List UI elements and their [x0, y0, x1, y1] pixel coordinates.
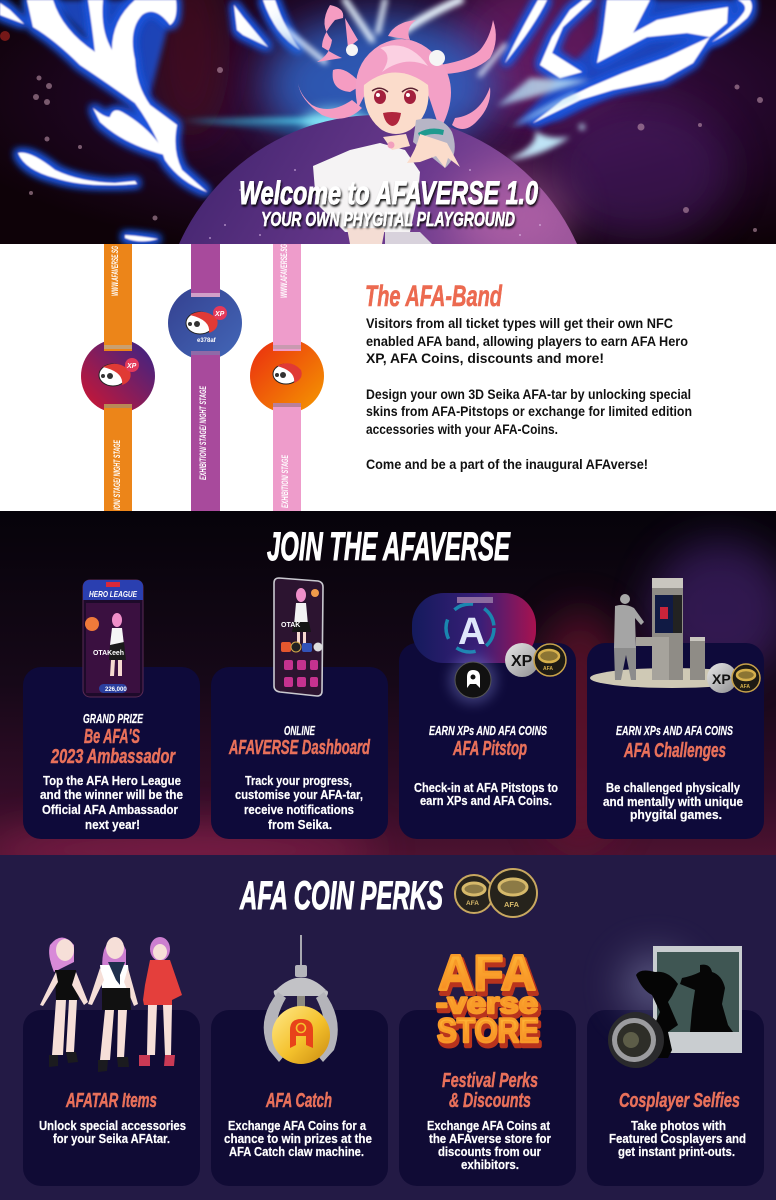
blue wash behind wisps: [50, 0, 755, 125]
card: AFA Challenges: phygital games.: [630, 807, 722, 822]
mascot: [273, 363, 302, 384]
card: Cosplayer Selfies: Take photos with: [631, 1118, 726, 1133]
hero subtitle: YOUR OWN PHYGITAL PLAYGROUND: [261, 209, 515, 231]
logo: AFA-verse store: -verse: [436, 987, 538, 1020]
heading: The AFA-Band: The AFA-Band: [365, 280, 502, 313]
sleeve: [413, 118, 455, 168]
card: Grand Prize: 2023 Ambassador: [50, 746, 176, 768]
card: Festival Perks: & Discounts: [449, 1090, 531, 1112]
icon: AFA coin: AFA: [740, 684, 750, 690]
card: Cosplayer Selfies: get instant print-outs.: [618, 1144, 735, 1159]
panel: hero banner: [0, 0, 776, 244]
card: AFA Pitstop: AFA Pitstop: [452, 738, 527, 760]
planet: [179, 115, 589, 244]
white outfit: [313, 143, 420, 232]
text block: band description: enabled AFA band, allowing players to earn AFA Hero: [366, 333, 688, 349]
icon: AFA coin pair: AFA: [466, 900, 479, 907]
wristband: pink: EXHIBITION/ STAGE: [280, 454, 290, 508]
face: [364, 72, 429, 134]
card: Festival Perks: Exchange AFA Coins at: [427, 1118, 551, 1133]
card: AFA Pitstop: earn XPs and AFA Coins.: [420, 793, 552, 808]
heading: AFA Coin Perks: AFA COIN PERKS: [239, 874, 443, 918]
hand: [407, 134, 460, 168]
card: Grand Prize: [23, 580, 200, 839]
icon: AFA coin: [732, 664, 760, 692]
logo: AFA-verse store: [436, 945, 541, 1054]
artwork: pale cyan wisps: [497, 78, 590, 160]
card: Festival Perks: [399, 945, 576, 1186]
wristband: orange: [81, 244, 155, 511]
illustration: challenge kiosk: [590, 578, 710, 688]
card: AFAVERSE Dashboard: ONLINE: [284, 723, 315, 738]
card: AFA Challenges: AFA Challenges: [623, 740, 726, 762]
card: Grand Prize: Be AFA'S: [84, 726, 140, 748]
card: Grand Prize: and the winner will be the: [40, 787, 183, 802]
card: Cosplayer Selfies: [587, 946, 764, 1186]
card: Festival Perks: discounts from our: [438, 1144, 541, 1159]
avatar: black dress: [40, 938, 88, 1067]
card: AFA Pitstop: [399, 593, 576, 839]
hair strands: [298, 5, 496, 129]
wristband: orange: WWW.AFAVERSE.SG: [110, 246, 120, 296]
avatar: red hoodie: [139, 937, 182, 1066]
card: AFAVERSE Dashboard: from Seika.: [268, 817, 332, 832]
avatar: sailor shirt: [88, 937, 138, 1072]
wristband: orange: XP: [126, 363, 137, 370]
icon: pitstop screen: [412, 593, 536, 663]
phone: Hero League: 226,000: [105, 687, 127, 693]
text block: band description: [366, 315, 692, 472]
artwork: glowing wisps: [0, 0, 752, 241]
heading: Join the AFAverse: JOIN THE AFAVERSE: [267, 525, 511, 569]
hero title: Welcome to AFAVERSE 1.0: [239, 175, 538, 211]
card: AFAVERSE Dashboard: AFAVERSE Dashboard: [228, 737, 371, 759]
card: AFA Catch: [211, 935, 388, 1186]
card: Grand Prize: next year!: [85, 817, 140, 832]
illustration: claw with coin: [264, 935, 338, 1064]
card: Festival Perks: Festival Perks: [442, 1070, 538, 1092]
artwork: streaks behind character: [265, 0, 505, 155]
logo: AFA-verse store: AFA: [438, 945, 536, 1001]
character: Seika: [298, 5, 496, 244]
mascot: [99, 364, 131, 386]
card: Festival Perks: the AFAverse store for: [429, 1131, 551, 1146]
phone: Hero League: HERO LEAGUE: [89, 589, 137, 599]
card: AFATAR Items: [23, 937, 200, 1186]
text block: band description: Visitors from all ticket types will get their own NFC: [366, 315, 673, 331]
card: Grand Prize: Official AFA Ambassador: [42, 802, 178, 817]
lens flare: [186, 100, 370, 135]
text block: band description: Design your own 3D Seika AFA-tar by unlocking special: [366, 386, 691, 402]
icon: AFA coin: [534, 644, 566, 676]
phone: dashboard: [274, 578, 323, 696]
icon: AFA coin pair: AFA: [504, 900, 520, 909]
wristband: pink: WWW.AFAVERSE.SG: [279, 244, 289, 298]
card: AFA Catch: chance to win prizes at the: [224, 1131, 372, 1146]
card: Festival Perks: exhibitors.: [461, 1157, 519, 1172]
card: AFA Challenges: Be challenged physically: [606, 780, 741, 795]
card: AFA Catch: Exchange AFA Coins for a: [228, 1118, 367, 1133]
card: AFA Pitstop: Check-in at AFA Pitstops to: [414, 780, 558, 795]
card: AFA Pitstop: EARN XPs AND AFA COINS: [429, 723, 547, 738]
logo: AFA-verse store: STORE: [439, 1016, 541, 1054]
card: Cosplayer Selfies: Featured Cosplayers and: [609, 1131, 746, 1146]
illustration: print-out and camera lens: [608, 946, 742, 1068]
icon: pitstop screen: A: [458, 611, 485, 653]
phone: Hero League: [83, 580, 143, 697]
card: Grand Prize: GRAND PRIZE: [83, 711, 143, 726]
card: AFATAR Items: AFATAR Items: [65, 1090, 157, 1112]
card: AFA Catch: AFA Catch claw machine.: [229, 1144, 364, 1159]
card: AFA Catch: AFA Catch: [265, 1090, 332, 1112]
wristband: purple: e378af: [197, 338, 217, 344]
card: AFATAR Items: for your Seika AFAtar.: [53, 1131, 170, 1146]
icon: XP coin: [707, 663, 737, 693]
wristband: purple: EXHIBITION/ STAGE/ NIGHT STAGE: [198, 385, 208, 480]
silhouette: armored cosplayer: [680, 965, 733, 1032]
panel: AFA-Band: [0, 244, 776, 511]
mascot: [186, 312, 218, 334]
wristband: purple: XP: [214, 311, 225, 318]
panel: AFA Coin Perks: [0, 855, 776, 1200]
text block: band description: XP, AFA Coins, discounts and more!: [366, 350, 604, 366]
logo: AFA-verse store: STORE: [437, 1012, 539, 1050]
card: AFAVERSE Dashboard: [211, 578, 388, 839]
card: AFAVERSE Dashboard: receive notifications: [244, 802, 354, 817]
card: AFA Challenges: and mentally with unique: [603, 794, 743, 809]
card: AFAVERSE Dashboard: Track your progress,: [245, 773, 352, 788]
wristband: pink: [250, 244, 324, 511]
card: AFA Challenges: [587, 578, 764, 839]
text block: band description: accessories with your AFA-Coins.: [366, 421, 558, 437]
card: Grand Prize: Top the AFA Hero League: [43, 773, 181, 788]
icon: AFA coin: AFA: [543, 666, 553, 672]
phone: dashboard: OTAK: [281, 622, 300, 629]
silhouette: female cosplayer: [636, 971, 678, 1058]
icon: AFA coin pair: [455, 869, 537, 917]
text block: band description: Come and be a part of the inaugural AFAverse!: [366, 456, 648, 472]
card: AFATAR Items: Unlock special accessories: [39, 1118, 186, 1133]
icon: XP coin: XP: [712, 671, 731, 687]
icon: XP coin: [505, 643, 539, 677]
logo: AFA-verse store: AFA: [440, 949, 538, 1005]
illustration: three avatars: [40, 937, 182, 1072]
camera lens: [608, 1012, 664, 1068]
hero title: [239, 175, 538, 231]
card: AFAVERSE Dashboard: customise your AFA-tar,: [235, 787, 363, 802]
wristband: orange: ION/ STAGE/ NIGHT STAGE: [112, 439, 122, 510]
icon: XP coin: XP: [511, 653, 533, 670]
logo: AFA-verse store: -verse: [438, 991, 540, 1024]
wristband: purple: [168, 244, 242, 511]
panel: Join the AFAverse: [0, 511, 776, 875]
text block: band description: skins from AFA-Pitstops or exchange for limited edition: [366, 403, 692, 419]
phone: Hero League: OTAKeeh: [93, 650, 124, 657]
icon: location marker: [449, 656, 497, 704]
